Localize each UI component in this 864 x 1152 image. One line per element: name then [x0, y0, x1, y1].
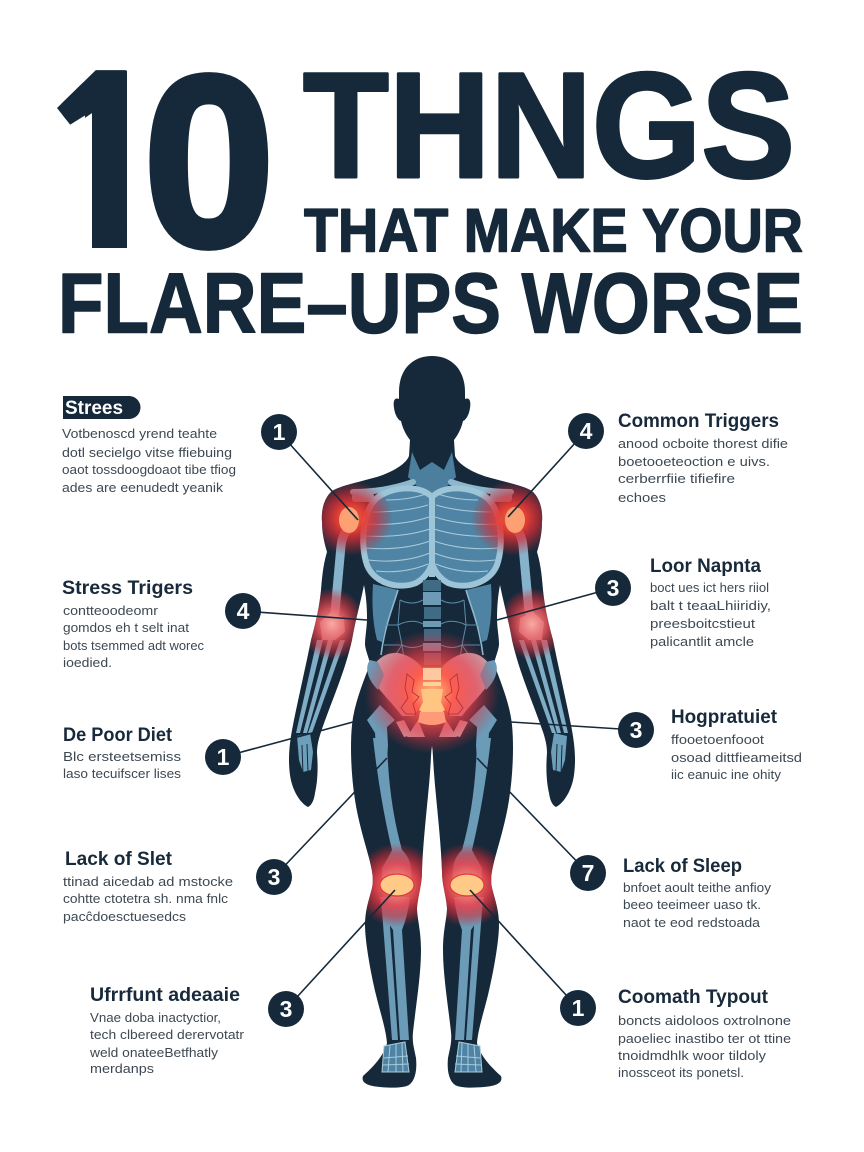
badge 3: 3 — [280, 996, 292, 1022]
text block: Coomath Typout: paoeliec inastibo ter ot ttine — [618, 1031, 791, 1046]
inflammation glows — [299, 480, 565, 927]
text block: Common Triggers: Common Triggers — [618, 411, 779, 432]
text block: Common Triggers: echoes — [618, 490, 667, 505]
sacrum and pelvic bone detail — [401, 668, 463, 725]
number badges — [205, 413, 654, 1027]
text block: Strees — [62, 396, 236, 495]
text block: Lack of Sleep: beeo teeimeer uaso tk. — [623, 897, 761, 912]
text block: Hogpratuiet: ffooetoenfooot — [671, 732, 764, 747]
leader lines — [223, 431, 636, 1009]
text block: Lack of Slet — [63, 849, 233, 924]
badge 4 — [568, 413, 604, 449]
badge 1 — [205, 739, 241, 775]
text block: Ufrrfunt adeaaie: weld onateeBetfhatly — [89, 1045, 219, 1060]
text block: Ufrrfunt adeaaie: Vnae doba inactyctior, — [90, 1010, 221, 1025]
text block: Lack of Slet: Lack of Slet — [65, 849, 173, 870]
title line: THAT MAKE YOUR: THAT MAKE YOUR — [304, 196, 803, 264]
badge 1 — [560, 990, 596, 1026]
text block: Loor Napnta: balt t teaaLhiiridiy, — [650, 598, 771, 613]
text block: Common Triggers: boetooeteoction e uivs. — [618, 454, 770, 469]
text block: Hogpratuiet — [671, 707, 802, 782]
text block: Common Triggers: anood ocboite thorest difie — [618, 436, 788, 451]
text block: Common Triggers: cerberrfiie tifiefire — [618, 471, 735, 486]
badge 4: 4 — [580, 418, 593, 444]
badge 3 — [268, 991, 304, 1027]
title number 10: 0 — [143, 24, 275, 298]
text block: Lack of Sleep: Lack of Sleep — [623, 856, 742, 877]
title number 10: 1 — [34, 23, 170, 296]
badge 1 — [261, 414, 297, 450]
text block: Lack of Sleep: naot te eod redstoada — [623, 915, 761, 930]
badge 3 — [618, 712, 654, 748]
text block: Strees: dotl secielgo vitse ffiebuing — [62, 445, 232, 460]
text block: Lack of Slet: cohtte ctotetra sh. nma fnlc — [63, 891, 229, 906]
body silhouette — [289, 356, 575, 1088]
text block: Stress Trigers: contteoodeomr — [63, 603, 159, 618]
text block: Stress Trigers — [62, 578, 204, 670]
human body figure — [289, 356, 575, 1088]
text block: Coomath Typout: tnoidmdhlk woor tildoly — [618, 1048, 767, 1063]
badge 3: 3 — [607, 575, 619, 601]
badge 7 — [570, 855, 606, 891]
badge 3: 3 — [268, 864, 280, 890]
glow: pelvis — [364, 630, 500, 754]
text block: Hogpratuiet: Hogpratuiet — [671, 707, 778, 728]
title line: THNGS: THNGS — [303, 41, 795, 209]
kneecaps — [380, 874, 484, 896]
pill heading: Strees — [63, 396, 140, 419]
badge 3 — [256, 859, 292, 895]
badge 3: 3 — [630, 717, 642, 743]
text block: Loor Napnta: palicantlit amcle — [650, 634, 754, 649]
text block: Loor Napnta: preesboitcstieut — [650, 616, 755, 631]
text block: Stress Trigers: bots tsemmed adt worec — [63, 638, 204, 653]
text block: Loor Napnta — [650, 556, 771, 649]
badge 7: 7 — [582, 860, 594, 886]
text block: Coomath Typout: Coomath Typout — [618, 987, 769, 1008]
badge 1: 1 — [217, 744, 230, 770]
text block: Lack of Slet: ttinad aicedab ad mstocke — [63, 874, 233, 889]
badge 3 — [595, 570, 631, 606]
title number 10 — [57, 70, 268, 251]
badge 4 — [225, 593, 261, 629]
badge 4: 4 — [237, 598, 250, 624]
text block: Strees: Votbenoscd yrend teahte — [62, 426, 217, 441]
text block: Coomath Typout: inossceot its ponetsl. — [618, 1065, 744, 1080]
glow: knees — [366, 844, 498, 926]
text block: De Poor Diet: laso tecuifscer lises — [63, 766, 182, 781]
badge 1: 1 — [273, 419, 286, 445]
text block: Common Triggers — [618, 411, 788, 505]
text block: Lack of Sleep — [623, 856, 772, 930]
text block: Loor Napnta: boct ues ict hers riiol — [650, 580, 769, 595]
text block: Ufrrfunt adeaaie: Ufrrfunt adeaaie — [90, 985, 240, 1006]
text block: Coomath Typout: boncts aidoloos oxtrolnone — [618, 1013, 791, 1028]
text block: Ufrrfunt adeaaie: tech clbereed derervotatr — [90, 1027, 245, 1042]
text block: De Poor Diet: Blc ersteetsemiss — [63, 749, 182, 764]
text block: Stress Trigers: ioedied. — [63, 655, 112, 670]
infographic page — [57, 70, 802, 1088]
text block: Strees: ades are eenudedt yeanik — [62, 480, 224, 495]
glow: elbows — [299, 588, 565, 660]
text block: De Poor Diet: De Poor Diet — [63, 725, 173, 746]
text block: Hogpratuiet: iic eanuic ine ohity — [671, 767, 782, 782]
text block: Lack of Sleep: bnfoet aoult teithe anfioy — [623, 880, 772, 895]
text block: De Poor Diet — [63, 725, 182, 781]
badge 1: 1 — [572, 995, 585, 1021]
glow: shoulders — [322, 482, 542, 555]
text block: Ufrrfunt adeaaie: merdanps — [90, 1061, 155, 1076]
skeleton and ribcage — [296, 452, 568, 1072]
text block: Loor Napnta: Loor Napnta — [650, 556, 761, 577]
text block: Hogpratuiet: osoad dittfieameitsd — [671, 750, 802, 765]
text block: Ufrrfunt adeaaie — [89, 985, 245, 1076]
text block: Coomath Typout — [618, 987, 791, 1080]
text block: Stress Trigers: gomdos eh t selt inat — [63, 620, 189, 635]
text block: Stress Trigers: Stress Trigers — [62, 578, 193, 599]
text block: Strees: oaot tossdoogdoaot tibe tfiog — [62, 462, 236, 477]
pill heading: Strees: Strees — [65, 398, 123, 419]
text block: Lack of Slet: pacĉdoesctuesedcs — [63, 909, 187, 924]
title — [57, 70, 802, 334]
